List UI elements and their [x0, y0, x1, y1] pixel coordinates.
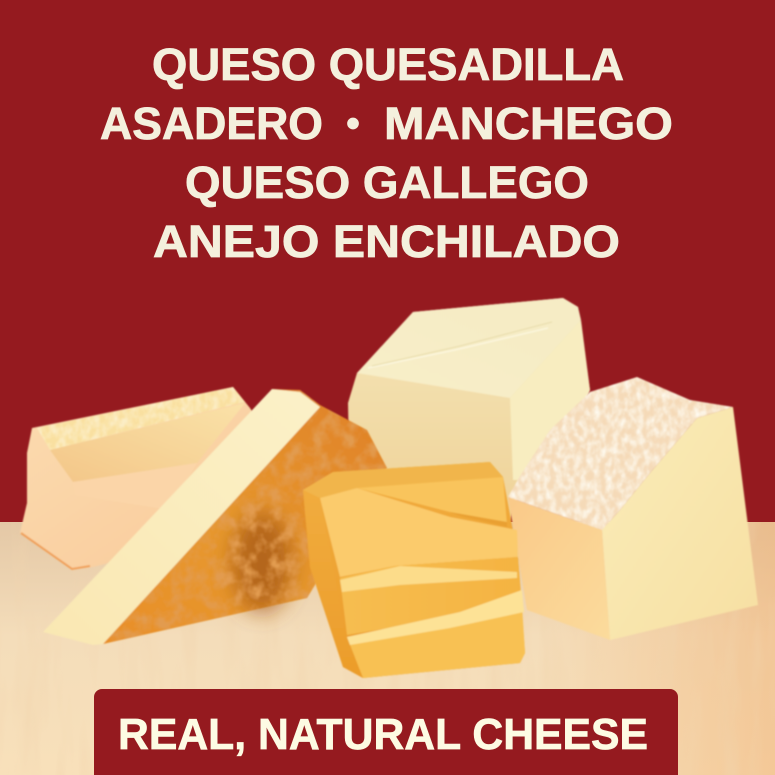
orange rear slab: [357, 477, 507, 525]
title line 2: MANCHEGO: [384, 98, 673, 149]
cheese: manchego wedge: [508, 377, 758, 640]
cheese: orange block: [303, 462, 525, 678]
orange top strip: [303, 462, 503, 498]
title line 2: [100, 98, 673, 149]
title line 2: •: [346, 103, 360, 145]
footer banner: [94, 689, 678, 775]
cheese: pale orange block: [20, 387, 290, 570]
cheese: paprika wedge: [43, 389, 387, 645]
orange upper slab: [320, 488, 518, 577]
orange middle band: [340, 557, 522, 635]
footer banner text: REAL, NATURAL CHEESE: [118, 710, 648, 759]
wedge cut face: [43, 389, 320, 645]
orange lower band: [347, 605, 525, 678]
wedge rind: [103, 389, 387, 644]
manchego right face: [602, 407, 758, 640]
title line 4: ANEJO ENCHILADO: [153, 216, 620, 267]
wooden table: [0, 522, 775, 775]
manchego rough top: [508, 377, 733, 530]
title line 1: QUESO QUESADILLA: [152, 39, 624, 90]
title line 2: ASADERO: [100, 98, 323, 149]
manchego left face: [508, 497, 610, 640]
title: [100, 39, 673, 267]
cheese: white block: [348, 298, 590, 520]
footer banner background: [94, 689, 678, 775]
title line 3: QUESO GALLEGO: [185, 157, 589, 208]
